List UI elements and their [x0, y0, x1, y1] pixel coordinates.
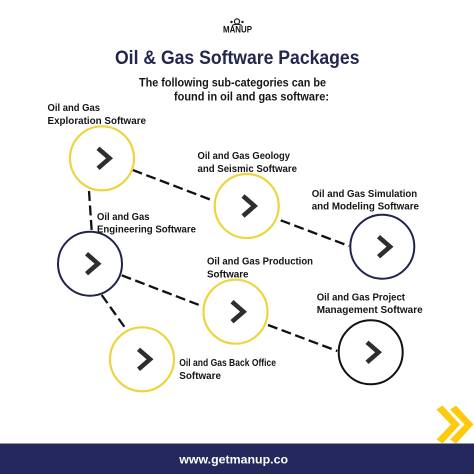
- node: Production Software: Oil and Gas Production: [207, 257, 313, 268]
- node: Engineering Software: Engineering Software: [97, 225, 196, 236]
- node: Geology and Seismic Software: Oil and Gas Geology: [198, 151, 290, 162]
- footer bar: www.getmanup.co: [178, 454, 288, 466]
- node: Simulation and Modeling Software: and Modeling Software: [312, 202, 419, 212]
- node: Simulation and Modeling Software: Oil and Gas Simulation: [312, 189, 417, 200]
- node: Geology and Seismic Software: and Seismic Software: [198, 164, 297, 175]
- logo: [223, 19, 253, 36]
- node: Production Software: Software: [207, 269, 249, 280]
- icon: double chevron: [436, 406, 474, 444]
- node: Exploration Software: [48, 103, 146, 190]
- node: Production Software: [204, 257, 313, 344]
- node: Project Management Software: [317, 293, 423, 384]
- node: Back Office Software: Oil and Gas Back Office: [179, 358, 276, 369]
- node: Engineering Software: Oil and Gas: [97, 212, 150, 223]
- node: Project Management Software: Management Software: [317, 305, 423, 316]
- node: Exploration Software: Exploration Software: [48, 116, 146, 127]
- node: Exploration Software: Oil and Gas: [48, 103, 100, 114]
- intro text: [139, 78, 329, 104]
- node: Project Management Software: Oil and Gas Project: [317, 293, 406, 304]
- footer bar: [0, 444, 474, 474]
- node: Geology and Seismic Software: [198, 151, 297, 238]
- intro text: The following sub-categories can be: [139, 78, 326, 90]
- node: Engineering Software: [58, 212, 196, 296]
- node: Simulation and Modeling Software: [312, 189, 419, 279]
- node: Back Office Software: [110, 327, 276, 391]
- connectors: [89, 170, 349, 351]
- node: Back Office Software: Software: [179, 371, 221, 382]
- intro text: found in oil and gas software:: [174, 92, 329, 104]
- logo: MANUP: [223, 24, 253, 36]
- title: Oil & Gas Software Packages: [115, 47, 360, 69]
